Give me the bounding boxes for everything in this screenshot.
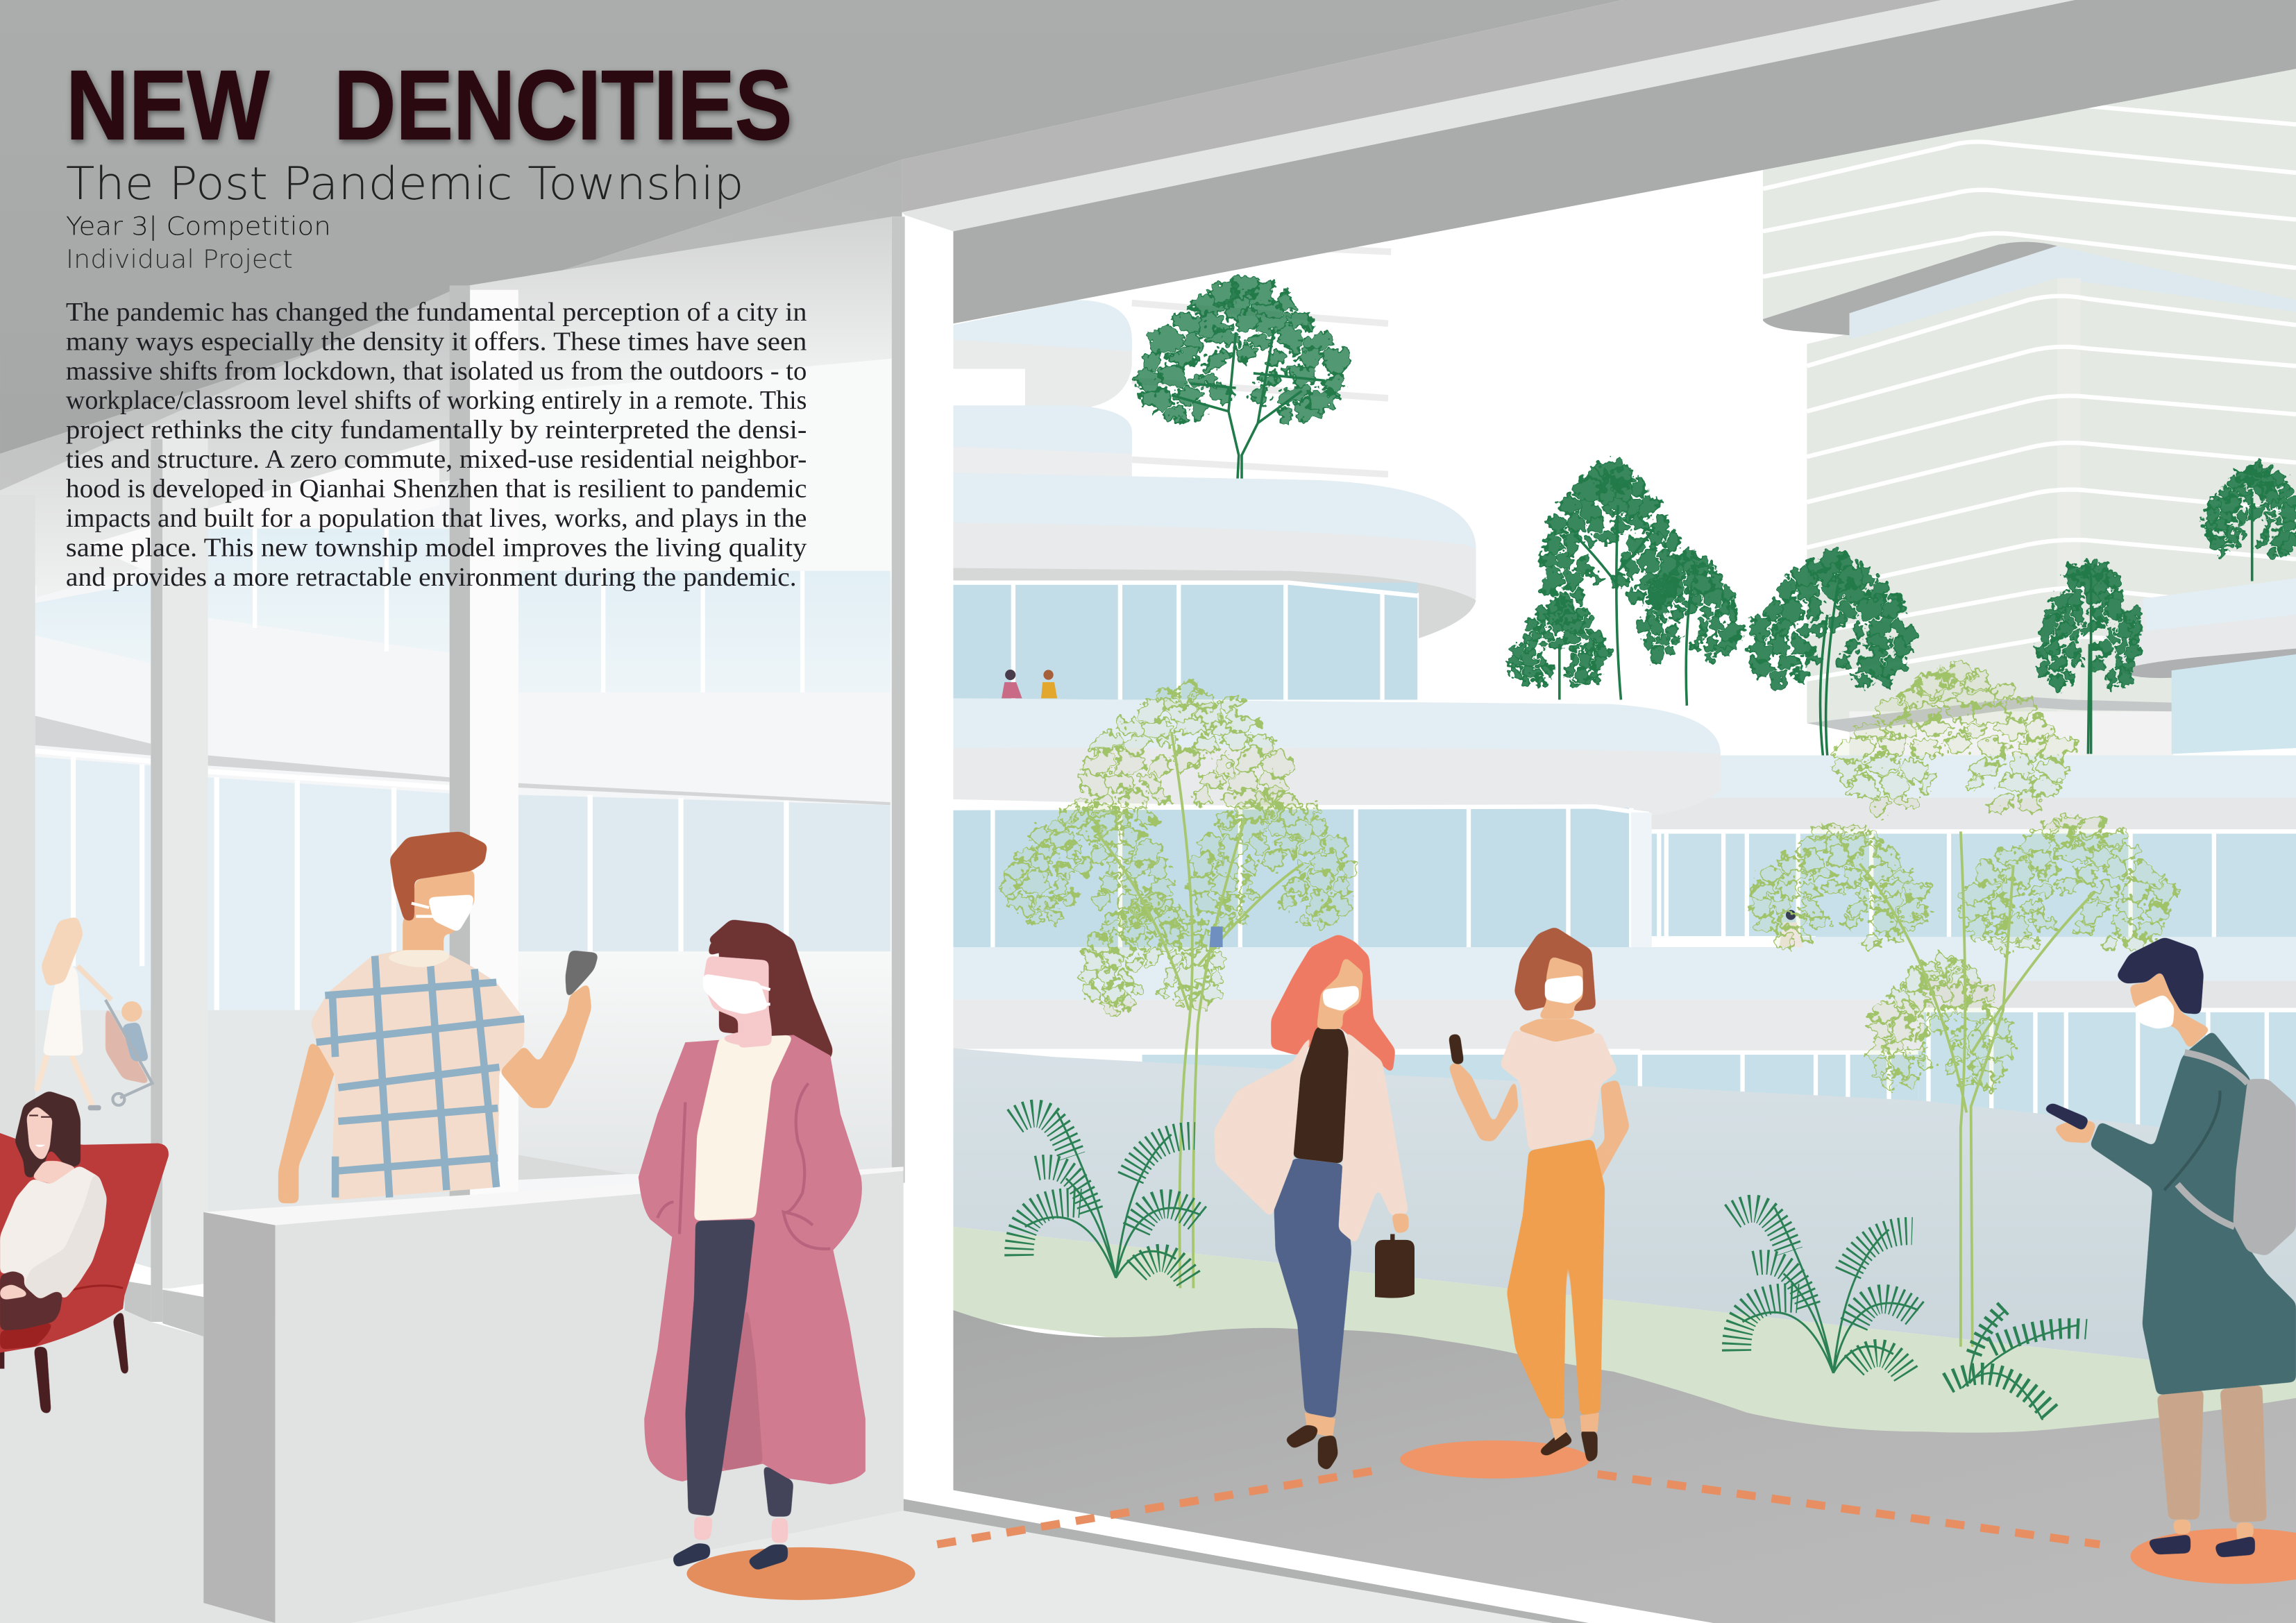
project author line: Individual Project bbox=[66, 244, 293, 274]
counter side bbox=[203, 1212, 276, 1623]
woman in cream cardigan with red hair bbox=[1214, 934, 1415, 1471]
interior glass background bbox=[0, 216, 892, 1318]
low windows above the planter wall bbox=[1142, 1053, 1918, 1105]
social distancing dashed line: left bbox=[937, 1470, 1379, 1545]
woman in pink coat bbox=[639, 919, 866, 1571]
woman pushing stroller (faded) bbox=[37, 917, 152, 1110]
tower: upper block bbox=[1763, 66, 2296, 335]
light green tree left bbox=[1002, 681, 1358, 1013]
second small balcony bbox=[953, 405, 1132, 477]
herb plant bbox=[1948, 1306, 2086, 1420]
interior lower windows bbox=[35, 751, 890, 1010]
green lawn bbox=[953, 1227, 2296, 1442]
interior balcony soffit arcs bbox=[35, 716, 890, 805]
top small balcony bbox=[953, 300, 1132, 407]
description paragraph: The pandemic has changed the fundamental perception of a city in bbox=[66, 298, 807, 327]
social distancing dashed line: centre to right bbox=[1598, 1474, 2100, 1545]
window sill grey strip bbox=[904, 1499, 1589, 1623]
left pillar bbox=[0, 495, 35, 1314]
ceiling beam lower grey band bbox=[953, 0, 2296, 323]
main balcony level 1 bbox=[953, 473, 1476, 638]
man in green coat with backpack bbox=[2043, 937, 2296, 1558]
counter top bbox=[203, 1166, 904, 1225]
description paragraph: massive shifts from lockdown, that isolated us from the outdoors - to bbox=[66, 357, 807, 386]
main balcony level 2 bbox=[953, 698, 1721, 815]
subtitle: The Post Pandemic Township bbox=[66, 158, 744, 210]
light green tree right bbox=[1746, 666, 2177, 1091]
dark green tree: roof tree bbox=[1135, 277, 1350, 423]
red armchair with seated woman bbox=[0, 1091, 169, 1414]
dark green tree trunks bbox=[1172, 330, 2252, 757]
title bbox=[66, 50, 792, 160]
light green tree right trunk bbox=[1859, 831, 2094, 1347]
glass mullion and column A bbox=[151, 425, 208, 1322]
windows level 1 bbox=[953, 583, 1417, 699]
far pale building with stripes bbox=[1132, 246, 1391, 475]
interior upper windows bbox=[35, 529, 890, 692]
planter wall bbox=[953, 1048, 2296, 1376]
interior lower walls bbox=[35, 951, 892, 1289]
glass mullion and column B bbox=[450, 285, 518, 1223]
windows level 2 bbox=[953, 806, 1652, 949]
description paragraph: and provides a more retractable environment during the pandemic. bbox=[66, 563, 797, 592]
ceiling beam grey band bbox=[902, 0, 1941, 212]
fern plant left bbox=[1015, 1112, 1201, 1280]
tower: lower block bbox=[1807, 241, 2296, 757]
interior floor right bbox=[351, 1511, 1552, 1623]
description paragraph: impacts and built for a population that lives, works, and plays in the bbox=[66, 504, 807, 533]
main balcony level 3 bbox=[953, 947, 1924, 1051]
distant people on balcony bbox=[1002, 670, 1057, 698]
back building level with windows bbox=[1649, 756, 2296, 1142]
man taking temperature bbox=[278, 831, 599, 1203]
dark green background trees bbox=[1509, 461, 2296, 690]
description paragraph: same place. This new township model improves the living quality bbox=[66, 533, 807, 562]
floor marker: right bbox=[2131, 1529, 2296, 1584]
ceiling beam white band bbox=[902, 0, 2075, 231]
title: DENCITIES bbox=[334, 50, 792, 160]
woman in orange trousers bbox=[1448, 926, 1630, 1464]
grey ground plaza bbox=[953, 1310, 2296, 1623]
title: NEW bbox=[66, 50, 270, 160]
floor marker: centre bbox=[1400, 1441, 1590, 1479]
reflection bands on glass bbox=[0, 216, 892, 597]
window sill white strip bbox=[904, 1490, 1713, 1623]
description paragraph: hood is developed in Qianhai Shenzhen that is resilient to pandemic bbox=[66, 474, 807, 503]
floor marker: left bbox=[686, 1547, 915, 1600]
fern plant right bbox=[1732, 1207, 1918, 1375]
project type line: Year 3| Competition bbox=[66, 212, 331, 242]
description paragraph: ties and structure. A zero commute, mixed-use residential neighbor- bbox=[66, 445, 807, 474]
ceiling slab left bbox=[0, 0, 1623, 454]
reflected ceiling band bbox=[0, 160, 902, 491]
description paragraph bbox=[66, 298, 807, 592]
glass base strips bbox=[124, 1262, 203, 1336]
description paragraph: workplace/classroom level shifts of working entirely in a remote. This bbox=[66, 386, 807, 415]
small blue distant person bbox=[1210, 926, 1223, 947]
main white window column bbox=[905, 215, 953, 1496]
grey strip next to main column bbox=[892, 216, 905, 1183]
description paragraph: many ways especially the density it offers. These times have seen bbox=[66, 327, 807, 356]
right balcony with blue column bbox=[2120, 578, 2296, 754]
interior floor left bbox=[0, 1303, 276, 1623]
counter front bbox=[276, 1171, 904, 1623]
light green tree left trunk bbox=[1098, 732, 1303, 1289]
description paragraph: project rethinks the city fundamentally by reinterpreted the densi- bbox=[66, 416, 807, 445]
